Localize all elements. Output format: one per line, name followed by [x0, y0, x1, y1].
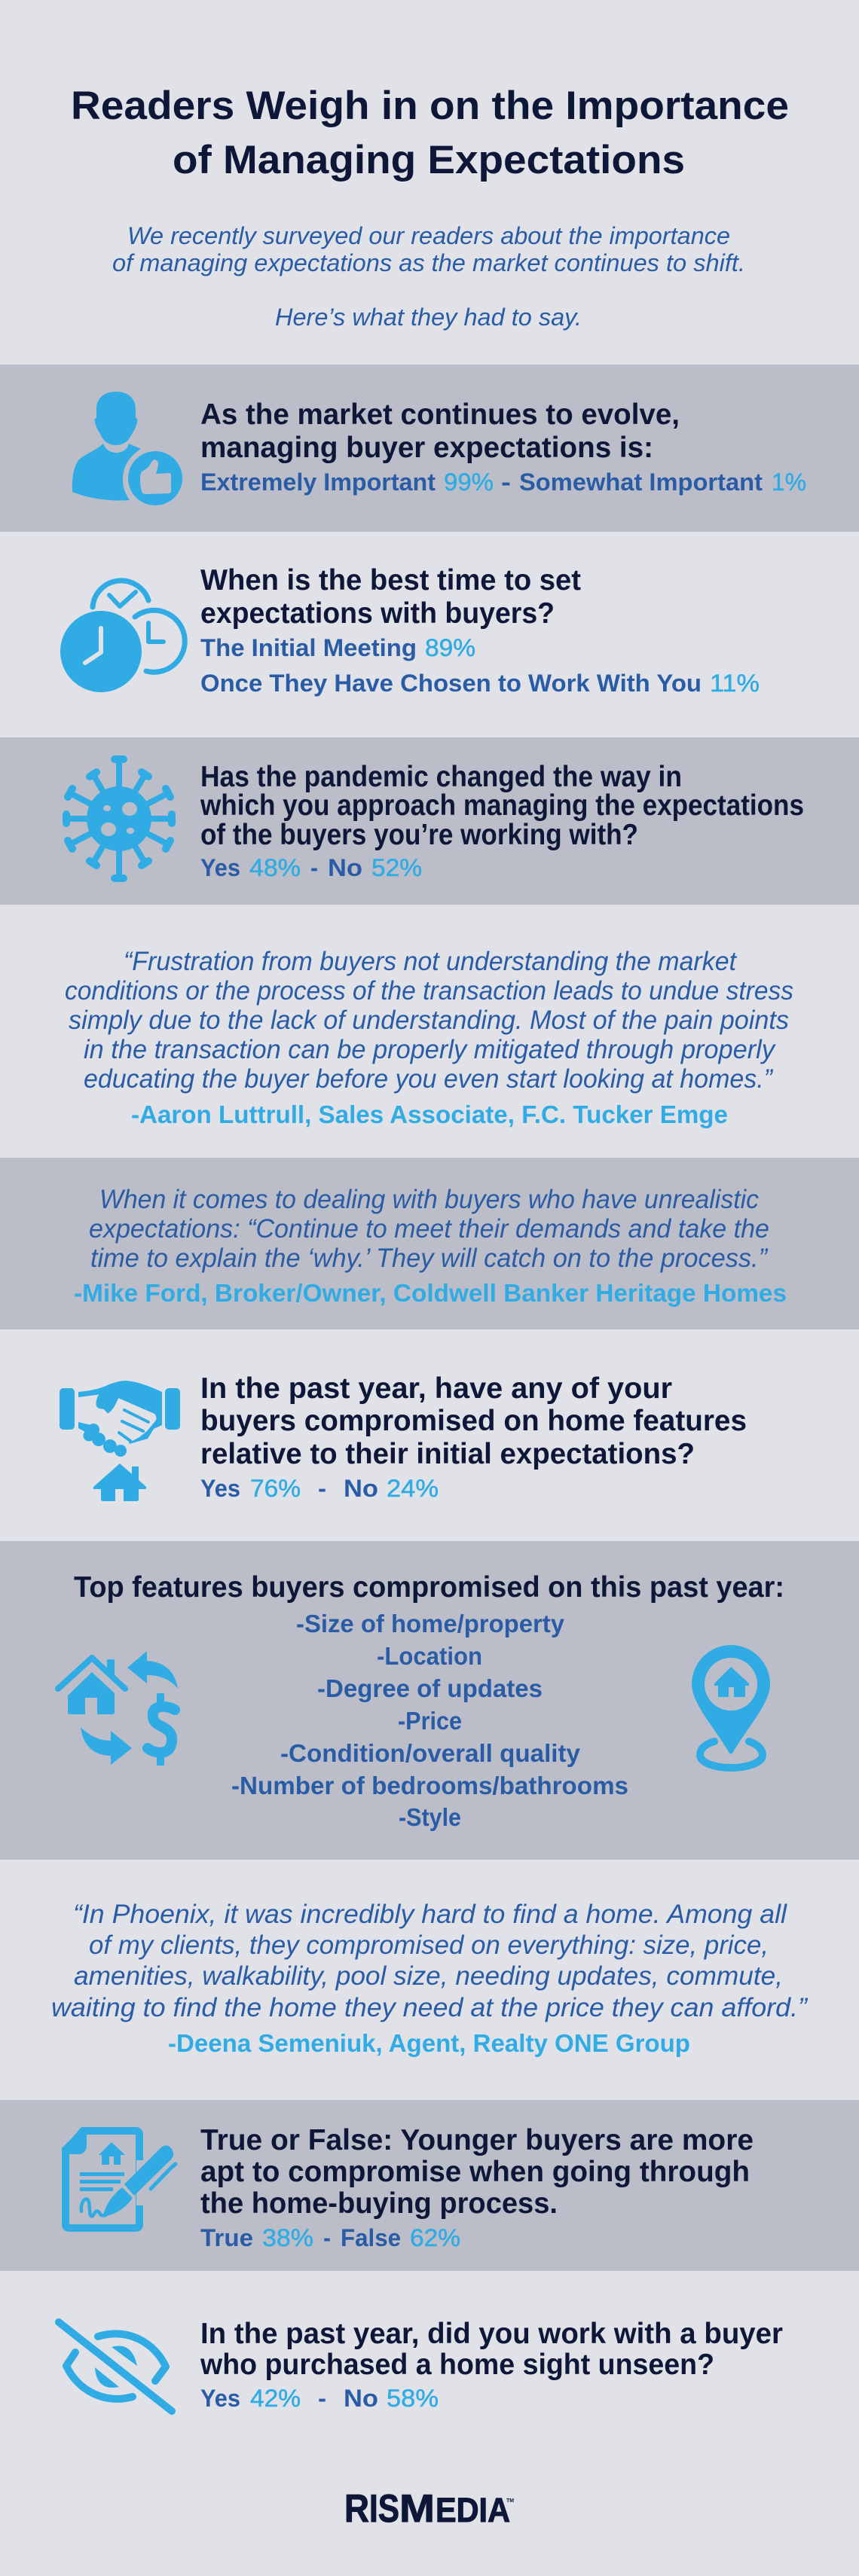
answers: 99% [444, 469, 494, 496]
feature list: -Size of home/property [296, 1610, 565, 1637]
icon: contract and pen [62, 2127, 176, 2228]
quote text [89, 1185, 769, 1273]
answers: The Initial Meeting [200, 634, 417, 661]
feature list: -Style [399, 1803, 461, 1831]
intro text: We recently surveyed our readers about the importance [127, 222, 730, 249]
answers: - [318, 2385, 326, 2412]
answers [200, 2385, 439, 2412]
title: of Managing Expectations [173, 138, 685, 182]
quote text [51, 1900, 808, 2022]
logo: RISMedia: IS [369, 2487, 399, 2531]
panel: top features compromised [0, 1541, 859, 1860]
title: Readers Weigh in on the Importance [71, 84, 789, 128]
logo: RISMedia [344, 2487, 514, 2531]
question: expectations with buyers? [200, 597, 555, 630]
icon: handshake with house [60, 1381, 180, 1501]
icon: house and dollar exchange [58, 1651, 178, 1766]
question: apt to compromise when going through [200, 2156, 750, 2188]
logo: RISMedia: R [344, 2487, 369, 2531]
answers: - [310, 854, 318, 881]
answers: No [344, 1475, 378, 1502]
answers: Extremely Important [200, 469, 436, 496]
answers: False [341, 2224, 401, 2251]
answers: 52% [371, 854, 422, 881]
panel: quote Deena Semeniuk [51, 1900, 808, 2057]
answers: 11% [710, 670, 760, 697]
answers: No [328, 854, 362, 881]
answers: 1% [772, 469, 806, 496]
question: buyers compromised on home features [200, 1405, 747, 1437]
intro text [112, 222, 745, 331]
feature list [231, 1610, 628, 1831]
attribution: -Aaron Luttrull, Sales Associate, F.C. Tucker Emge [131, 1100, 728, 1128]
question: Has the pandemic changed the way in [200, 761, 682, 793]
answers: Yes [200, 1475, 240, 1502]
question [200, 1372, 747, 1470]
answers: - [323, 2224, 331, 2251]
feature list: -Condition/overall quality [280, 1739, 581, 1767]
question [200, 2318, 783, 2381]
quote text: When it comes to dealing with buyers who have unrealistic [99, 1185, 759, 1214]
answers [200, 2224, 460, 2251]
question: In the past year, did you work with a buyer [200, 2318, 783, 2350]
answers: Yes [200, 854, 240, 881]
answers [200, 1475, 439, 1502]
quote text: “In Phoenix, it was incredibly hard to find a home. Among all [73, 1900, 787, 1929]
feature list: -Price [398, 1707, 462, 1735]
intro text: of managing expectations as the market continues to shift. [112, 249, 745, 276]
question: When is the best time to set [200, 564, 581, 597]
answers [200, 854, 422, 881]
quote text: educating the buyer before you even start looking at homes.” [84, 1064, 773, 1094]
panel: best time to set expectations [60, 564, 760, 697]
question: As the market continues to evolve, [200, 398, 680, 431]
question: which you approach managing the expectations [200, 789, 804, 822]
panel: pandemic question [0, 737, 859, 905]
quote text [65, 947, 793, 1094]
logo: RISMedia: M [399, 2487, 435, 2531]
panel: true or false question [0, 2100, 859, 2271]
answers: 24% [387, 1475, 439, 1502]
answers [200, 469, 806, 496]
answers: - [318, 1475, 326, 1502]
question [200, 398, 680, 464]
question: managing buyer expectations is: [200, 432, 653, 464]
attribution: -Deena Semeniuk, Agent, Realty ONE Group [168, 2029, 690, 2057]
answers: No [344, 2385, 378, 2412]
answers: Somewhat Important [519, 469, 763, 496]
icon: location pin with house [692, 1645, 770, 1768]
quote text: “Frustration from buyers not understanding the market [124, 947, 737, 976]
answers: 62% [410, 2224, 460, 2251]
answers: 48% [249, 854, 301, 881]
quote text: simply due to the lack of understanding. Most of the pain points [69, 1006, 789, 1035]
logo: RISMedia: EDIA [436, 2491, 510, 2529]
quote text: waiting to find the home they need at the price they can afford.” [51, 1993, 808, 2022]
quote text: amenities, walkability, pool size, needing updates, commute, [74, 1961, 783, 1991]
icon: person with thumbs up [72, 392, 182, 505]
question: of the buyers you’re working with? [200, 819, 638, 851]
answers: - [501, 469, 511, 496]
panel: sight unseen question [59, 2318, 783, 2412]
question: In the past year, have any of your [200, 1372, 672, 1405]
answers: 89% [425, 634, 475, 661]
panel: quote Aaron Luttrull [65, 947, 793, 1128]
question: True or False: Younger buyers are more [200, 2124, 754, 2156]
panel: buyers compromised question [60, 1372, 747, 1502]
icon: clocks [60, 581, 185, 692]
attribution: -Mike Ford, Broker/Owner, Coldwell Banker Heritage Homes [74, 1279, 787, 1307]
panel: quote Mike Ford [0, 1158, 859, 1329]
question: relative to their initial expectations? [200, 1438, 695, 1470]
quote text: of my clients, they compromised on everything: size, price, [89, 1930, 769, 1960]
feature list: -Location [377, 1642, 482, 1670]
answers: True [200, 2224, 253, 2251]
panel: buyer expectations importance [0, 365, 859, 532]
quote text: conditions or the process of the transaction leads to undue stress [65, 976, 793, 1006]
intro text: Here’s what they had to say. [275, 304, 582, 331]
answers: 38% [262, 2224, 313, 2251]
answers: 76% [250, 1475, 301, 1502]
logo: RISMedia: TM [506, 2498, 514, 2504]
feature list: -Degree of updates [317, 1674, 543, 1702]
answers [200, 634, 760, 697]
quote text: expectations: “Continue to meet their demands and take the [89, 1214, 769, 1244]
icon: virus [66, 759, 172, 878]
quote text: in the transaction can be properly mitigated through properly [84, 1035, 776, 1064]
title [71, 84, 789, 182]
question: who purchased a home sight unseen? [200, 2349, 714, 2381]
answers: 58% [387, 2385, 439, 2412]
question [200, 761, 804, 851]
question [200, 564, 581, 630]
icon: crossed out eye [59, 2322, 172, 2411]
heading: Top features buyers compromised on this past year: [74, 1571, 784, 1604]
answers: 42% [250, 2385, 301, 2412]
quote text: time to explain the ‘why.’ They will catch on to the process.” [90, 1244, 768, 1273]
question [200, 2124, 754, 2220]
question: the home-buying process. [200, 2187, 558, 2220]
answers: Yes [200, 2385, 240, 2412]
feature list: -Number of bedrooms/bathrooms [231, 1772, 628, 1799]
answers: Once They Have Chosen to Work With You [200, 670, 702, 697]
